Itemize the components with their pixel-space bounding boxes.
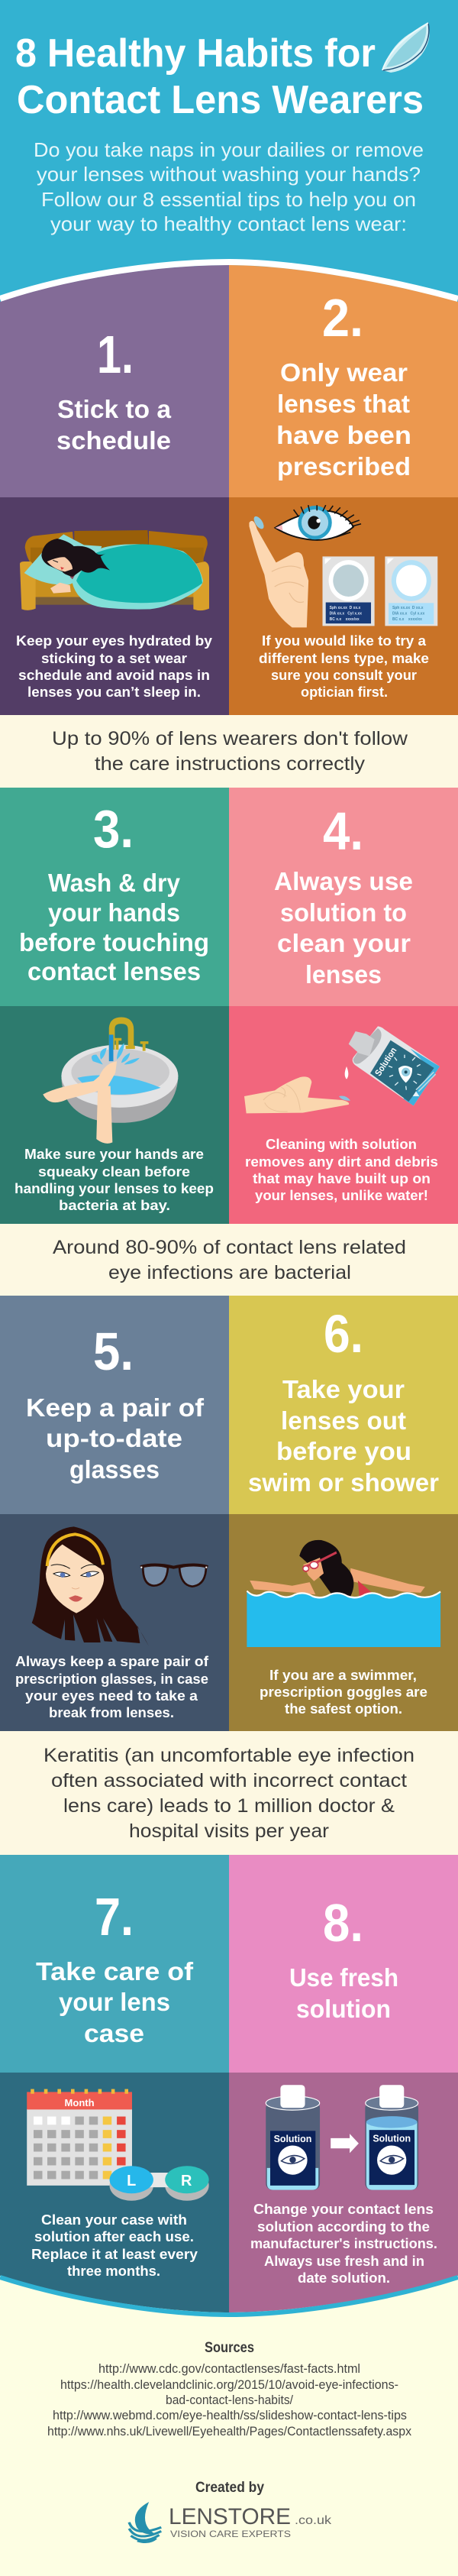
logo: lenstore — [129, 2502, 332, 2542]
panel: habit 2 only wear prescribed lenses — [229, 265, 458, 715]
intro text: your lenses without washing your hands? — [37, 163, 421, 186]
panel: habit 8 fresh solution — [229, 1855, 458, 2312]
icon: calendar and lens case: L — [127, 2173, 136, 2189]
heading: take lenses out: lenses out — [281, 1406, 406, 1435]
description text: your lenses, unlike water! — [255, 1187, 428, 1203]
stat band 3: often associated with incorrect contact — [51, 1770, 407, 1791]
stat band 1 — [0, 715, 458, 788]
description text: Make sure your hands are — [24, 1146, 204, 1162]
panel: habit 5 keep glasses — [0, 1296, 229, 1731]
heading: wash and dry: contact lenses — [27, 957, 201, 985]
stat band 3: hospital visits per year — [129, 1820, 329, 1842]
description text: handling your lenses to keep — [15, 1180, 214, 1196]
icon: eye, finger and lens packs: BC x.x xxxx/xx — [330, 617, 360, 622]
heading: wash and dry: before touching — [19, 928, 209, 956]
intro text — [34, 138, 424, 235]
description text: different lens type, make — [259, 650, 429, 666]
heading: keep a pair of glasses: up-to-date — [46, 1424, 182, 1452]
icon: solution bottle and hand — [244, 1026, 440, 1113]
icon: calendar and lens case — [27, 2089, 209, 2201]
icon: lenstore swirl — [129, 2502, 161, 2542]
heading: always use solution — [274, 867, 413, 989]
title: Contact Lens Wearers — [17, 78, 424, 122]
heading: take care of case: case — [84, 2019, 144, 2047]
heading: use fresh solution: Use fresh — [289, 1963, 398, 1992]
stat band 2: eye infections are bacterial — [108, 1262, 351, 1283]
description text — [245, 1136, 438, 1203]
icon: eye, finger and lens packs: DIA xx.x Cyl x.xx — [392, 612, 424, 616]
heading: wash and dry: Wash & dry — [48, 869, 181, 897]
heading: take lenses out: swim or shower — [248, 1468, 439, 1497]
heading: only wear lenses: Only wear — [280, 358, 408, 387]
logo: lenstore: VISION CARE EXPERTS — [170, 2529, 291, 2539]
logo: lenstore: LENSTORE — [169, 2504, 291, 2529]
description text: prescription goggles are — [260, 1684, 427, 1700]
stat band 2 — [0, 1224, 458, 1296]
description text: solution after each use. — [34, 2228, 194, 2244]
number 7: 7. — [95, 1887, 134, 1947]
stat band 2: Around 80-90% of contact lens related — [53, 1237, 406, 1258]
number 1: 1. — [97, 325, 134, 384]
heading: take lenses out: Take your — [282, 1375, 405, 1403]
description text: bacteria at bay. — [59, 1197, 170, 1213]
icon: hands washing at sink — [43, 1021, 178, 1144]
number 6: 6. — [324, 1304, 363, 1364]
logo: lenstore: .co.uk — [295, 2514, 332, 2527]
description text: the safest option. — [285, 1701, 402, 1717]
heading: always use solution: clean your — [277, 929, 411, 957]
heading: use fresh solution — [289, 1963, 398, 2023]
description text: sticking to a set wear — [41, 650, 187, 666]
description text: manufacturer's instructions. — [250, 2235, 437, 2251]
heading: only wear lenses: prescribed — [277, 452, 411, 481]
heading: only wear lenses — [276, 358, 411, 481]
description text: Cleaning with solution — [266, 1136, 417, 1152]
panel: habit 7 lens case — [0, 1855, 229, 2312]
icon: solution bottles and arrow: Solution — [274, 2134, 311, 2144]
icon: calendar and lens case: R — [181, 2173, 192, 2189]
number 8: 8. — [323, 1893, 363, 1953]
description text — [15, 1146, 214, 1213]
icon: contact lens — [382, 23, 430, 73]
header panel — [0, 0, 458, 321]
stat band 3 — [0, 1731, 458, 1855]
icon: calendar and lens case: Month — [65, 2098, 95, 2108]
panel: habit 3 wash and dry hands — [0, 788, 229, 1224]
description text: optician first. — [301, 684, 388, 700]
heading: take care of case — [36, 1957, 194, 2047]
heading: only wear lenses: have been — [276, 421, 411, 449]
heading: stick to a schedule — [56, 395, 172, 455]
heading: take care of case: your lens — [59, 1988, 170, 2016]
description text: Replace it at least every — [31, 2246, 198, 2262]
sources: http://www.webmd.com/eye-health/ss/slideshow-contact-lens-tips — [53, 2408, 407, 2422]
description text: date solution. — [298, 2270, 390, 2286]
stat band 3: lens care) leads to 1 million doctor & — [63, 1795, 395, 1817]
description text: solution according to the — [257, 2218, 430, 2235]
description text: break from lenses. — [49, 1704, 174, 1720]
number 5: 5. — [93, 1322, 134, 1381]
heading: take lenses out: before you — [276, 1437, 411, 1465]
icon: woman and glasses — [32, 1526, 208, 1646]
heading: always use solution: solution to — [280, 898, 407, 927]
description text: removes any dirt and debris — [245, 1154, 438, 1170]
title: 8 Healthy Habits for — [15, 31, 376, 76]
intro text: your way to healthy contact lens wear: — [50, 212, 407, 235]
heading: only wear lenses: lenses that — [277, 390, 410, 418]
description text — [259, 633, 429, 700]
header curve — [0, 262, 458, 299]
heading: wash and dry — [19, 869, 209, 985]
icon: swimmer in water — [247, 1540, 440, 1647]
sources: http://www.nhs.uk/Livewell/Eyehealth/Pages/Contactlenssafety.aspx — [47, 2424, 411, 2438]
description text: If you would like to try a — [262, 633, 427, 649]
icon: solution bottles and arrow — [266, 2085, 418, 2190]
panel: habit 1 stick to a schedule — [0, 265, 229, 715]
description text: that may have built up on — [253, 1170, 431, 1186]
description text: sure you consult your — [271, 667, 417, 683]
description text — [250, 2201, 437, 2286]
number 4: 4. — [323, 801, 363, 861]
description text: Always use fresh and in — [264, 2253, 424, 2269]
panel: habit 4 always use solution — [229, 788, 458, 1224]
description text: Clean your case with — [41, 2212, 187, 2228]
description text — [15, 1653, 209, 1720]
icon: solution bottles and arrow: Solution — [373, 2133, 411, 2144]
icon: eye, finger and lens packs — [249, 505, 437, 627]
bottom curve — [0, 2277, 458, 2315]
heading: keep a pair of glasses — [26, 1393, 205, 1484]
description text: lenses you can’t sleep in. — [27, 684, 201, 700]
sources — [47, 2340, 411, 2438]
heading: always use solution: lenses — [305, 960, 382, 989]
sources: bad-contact-lens-habits/ — [166, 2393, 293, 2407]
sources: Sources — [205, 2340, 254, 2356]
title — [15, 31, 424, 122]
heading: keep a pair of glasses: Keep a pair of — [26, 1393, 205, 1422]
description text — [31, 2212, 198, 2279]
sources: http://www.cdc.gov/contactlenses/fast-facts.html — [98, 2361, 360, 2376]
intro text: Do you take naps in your dailies or remove — [34, 138, 424, 161]
description text: squeaky clean before — [38, 1163, 190, 1180]
heading: stick to a schedule: schedule — [56, 426, 171, 455]
sources: https://health.clevelandclinic.org/2015/10/avoid-eye-infections- — [60, 2377, 398, 2392]
icon: eye, finger and lens packs: DIA xx.x Cyl x.xx — [330, 612, 362, 616]
description text: schedule and avoid naps in — [18, 667, 210, 683]
stat band 1: Up to 90% of lens wearers don't follow — [52, 728, 408, 749]
description text: Change your contact lens — [253, 2201, 434, 2217]
icon: eye, finger and lens packs: Sph xx.xx D xx.x — [392, 606, 424, 610]
heading: keep a pair of glasses: glasses — [69, 1455, 160, 1484]
description text — [260, 1667, 427, 1717]
number 3: 3. — [93, 799, 134, 859]
icon: woman sleeping on sofa — [20, 530, 209, 610]
intro text: Follow our 8 essential tips to help you on — [41, 188, 416, 211]
heading: take care of case: Take care of — [36, 1957, 194, 1985]
stat band 3: Keratitis (an uncomfortable eye infection — [44, 1745, 414, 1766]
stat band 1: the care instructions correctly — [95, 753, 366, 775]
created by: Created by — [195, 2480, 264, 2496]
icon: eye, finger and lens packs: BC x.x xxxx/xx — [392, 617, 422, 622]
number 2: 2. — [322, 288, 363, 348]
description text: If you are a swimmer, — [269, 1667, 417, 1683]
icon: eye, finger and lens packs: Sph xx.xx D xx.x — [330, 606, 360, 610]
description text — [16, 633, 213, 700]
heading: take lenses out — [248, 1375, 439, 1497]
heading: stick to a schedule: Stick to a — [57, 395, 172, 423]
description text: Always keep a spare pair of — [15, 1653, 209, 1669]
icon: solution bottle and hand: Solution — [373, 1045, 399, 1078]
heading: wash and dry: your hands — [48, 898, 180, 927]
description text: your eyes need to take a — [25, 1688, 198, 1704]
heading: use fresh solution: solution — [296, 1995, 391, 2023]
panel: habit 6 swim or shower — [229, 1296, 458, 1731]
description text: three months. — [67, 2263, 160, 2279]
heading: always use solution: Always use — [274, 867, 413, 895]
description text: prescription glasses, in case — [15, 1671, 208, 1687]
description text: Keep your eyes hydrated by — [16, 633, 213, 649]
